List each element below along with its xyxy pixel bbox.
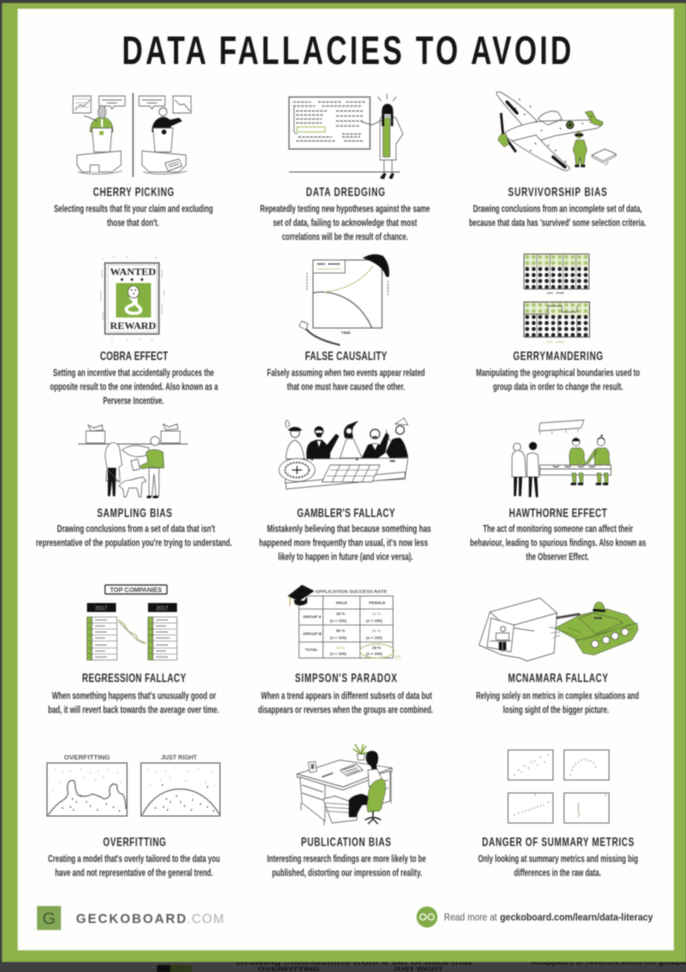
description: likely to happen in future (and vice versa). [278,552,413,563]
description: Setting an incentive that accidentally produces the [53,368,214,379]
illustration: people around roulette table [279,418,408,489]
panel: cherry picking [54,93,213,229]
illustration: admissions table with mortarboard: TOTAL [305,647,319,652]
description: Falsely assuming when two events appear related [267,368,425,379]
heading: OVERFITTING [103,837,166,849]
title: DATA FALLACIES TO AVOID [122,28,571,73]
footer logo: Geckoboard [37,906,224,930]
description [48,691,219,716]
description: Perverse Incentive. [103,396,164,407]
illustration: scientist at whiteboard [289,94,403,179]
heading: REGRESSION FALLACY [82,673,186,685]
panel: data dredging [260,94,430,243]
description: Repeatedly testing new hypotheses against the same [260,204,430,215]
description [267,854,426,879]
description: differences in the raw data. [514,868,601,879]
cropped neighbouring content at bottom edge: Drawing conclusions from a set of data that [236,960,472,966]
footer logo: Geckoboard: G [42,909,56,928]
footer logo: Geckoboard: GECKOBOARD [76,911,186,926]
panel: danger of summary metrics [478,750,638,879]
illustration: four scatter plots [508,750,609,823]
illustration: admissions table with mortarboard: ?? [394,656,401,662]
description: opposite result to the one intended. Also known as a [50,382,218,393]
illustration: admissions table with mortarboard: 12 % [372,611,382,616]
panel: survivorship bias [469,92,646,229]
heading: CHERRY PICKING [93,187,174,199]
description: Interesting research findings are more likely to be [267,854,426,865]
heading: SIMPSON'S PARADOX [295,673,397,685]
illustration: top companies league tables: 2017 [95,606,107,612]
description: Mistakenly believing that because something has [267,524,431,535]
description [476,691,639,716]
description: the Observer Effect. [526,552,589,563]
illustration: admissions table with mortarboard: (n = 100) [330,651,347,656]
heading: GERRYMANDERING [513,351,603,363]
illustration: top companies league tables: 2017 [156,606,168,612]
description: bad, it will revert back towards the average over time. [48,705,219,716]
description: When something happens that's unusually good or [52,691,216,702]
illustration: admissions table with mortarboard: 50 % [336,628,346,633]
illustration: admissions table with mortarboard: GROUP A [303,614,322,619]
illustration: admissions table with mortarboard: 51 % [372,628,382,633]
description [258,691,433,716]
panel: cobra effect [50,255,218,407]
heading: COBRA EFFECT [100,351,169,363]
illustration: damaged plane and soldier [496,92,616,171]
description [260,204,430,243]
description [478,854,638,879]
footer logo: Geckoboard: .COM [187,911,224,926]
illustration: admissions table with mortarboard: (n = 100) [330,635,347,640]
illustration: survey takers and dog [78,424,188,498]
description: Selecting results that fit your claim and excluding [54,204,213,215]
panel: publication bias [267,744,426,879]
description: published, distorting our impression of reality. [272,868,422,879]
illustration: admissions table with mortarboard: (n = 100) [330,618,347,623]
description: When a trend appears in different subsets of data but [261,691,432,702]
heading: PUBLICATION BIAS [301,837,391,849]
illustration: admissions table with mortarboard: MALE [336,600,348,605]
description [50,368,218,407]
illustration: overfit vs just right plots: OVERFITTING [64,756,110,762]
description [476,368,640,393]
illustration: wanted poster with snake [101,255,164,341]
illustration: pirate chart with hat and sword [299,254,389,345]
illustration: two politicians at podiums [73,93,191,177]
description [259,524,431,563]
panel: overfitting [47,756,220,879]
illustration: overfit vs just right plots [47,756,220,816]
panel: sampling bias [36,424,232,549]
footer link: read more [416,906,653,928]
icon: glasses [416,906,438,928]
description [469,204,646,229]
description: happened more frequently than usual, it's now less [259,538,428,549]
cropped neighbouring content at bottom edge [157,960,686,972]
illustration: admissions table with mortarboard: (n = 100) [366,635,383,640]
illustration: admissions table with mortarboard: APPLICATION SUCCESS RATE [315,589,387,594]
heading: DATA DREDGING [306,187,385,199]
heading: DANGER OF SUMMARY METRICS [482,837,634,849]
description: disappears or reverses when the groups are combined. [258,705,433,716]
illustration: tank leaving a tent [479,598,638,661]
illustration: admissions table with mortarboard: FEMALE [369,600,386,605]
description: Creating a model that's overly tailored to the data you [48,854,220,865]
description [470,524,646,563]
heading: MCNAMARA FALLACY [508,673,608,685]
illustration: factory workers being observed [512,420,611,497]
description: correlations will be the result of chance. [282,232,408,243]
illustration: researcher at messy desk [297,744,392,825]
illustration: admissions table with mortarboard: 34 % [336,645,346,650]
panel: gambler's fallacy [259,418,431,563]
cropped neighbouring content at bottom edge: disappears or reverses when the groups [531,960,686,966]
heading: FALSE CAUSALITY [305,351,387,363]
panel: false causality [267,254,425,393]
description: Drawing conclusions from a set of data that isn't [57,524,215,535]
heading: GAMBLER'S FALLACY [297,508,395,520]
description [48,854,220,879]
illustration: wanted poster with snake: WANTED [110,267,157,277]
illustration: admissions table with mortarboard: 28 % [372,645,382,650]
illustration: pirate chart with hat and sword: TIME [341,330,351,335]
illustration: top companies league tables: TOP COMPANIES [110,588,162,594]
illustration: admissions table with mortarboard: (n = 100) [366,651,383,656]
illustration: wanted poster with snake: REWARD [110,321,157,331]
panel: gerrymandering [476,254,640,393]
illustration: two voting district grids [524,254,590,342]
illustration: admissions table with mortarboard: GROUP B [303,631,322,636]
read-more text: Read more at [444,912,497,924]
heading: SURVIVORSHIP BIAS [508,187,607,199]
description: representative of the population you're trying to understand. [36,538,232,549]
description: that one must have caused the other. [287,382,405,393]
illustration: admissions table with mortarboard: 18 % [336,611,346,616]
description [267,368,425,393]
illustration: overfit vs just right plots: JUST RIGHT [161,756,197,762]
panel: simpson's paradox [258,585,433,716]
illustration: admissions table with mortarboard: (n = 100) [366,618,383,623]
illustration: top companies league tables [87,585,177,660]
description: losing sight of the bigger picture. [503,705,609,716]
panel: hawthorne effect [470,420,646,563]
description [54,204,213,229]
footer link: read more: geckoboard.com/learn/data-literacy [500,912,653,924]
heading: SAMPLING BIAS [97,508,172,520]
panel: mcnamara fallacy [476,598,639,716]
panel: regression fallacy [48,585,219,716]
heading: HAWTHORNE EFFECT [509,508,608,520]
description: those that don't. [107,218,159,229]
description: set of data, failing to acknowledge that most [273,218,417,229]
illustration: admissions table with mortarboard [288,585,401,662]
description [36,524,232,549]
description: have and not representative of the general trend. [55,868,213,879]
